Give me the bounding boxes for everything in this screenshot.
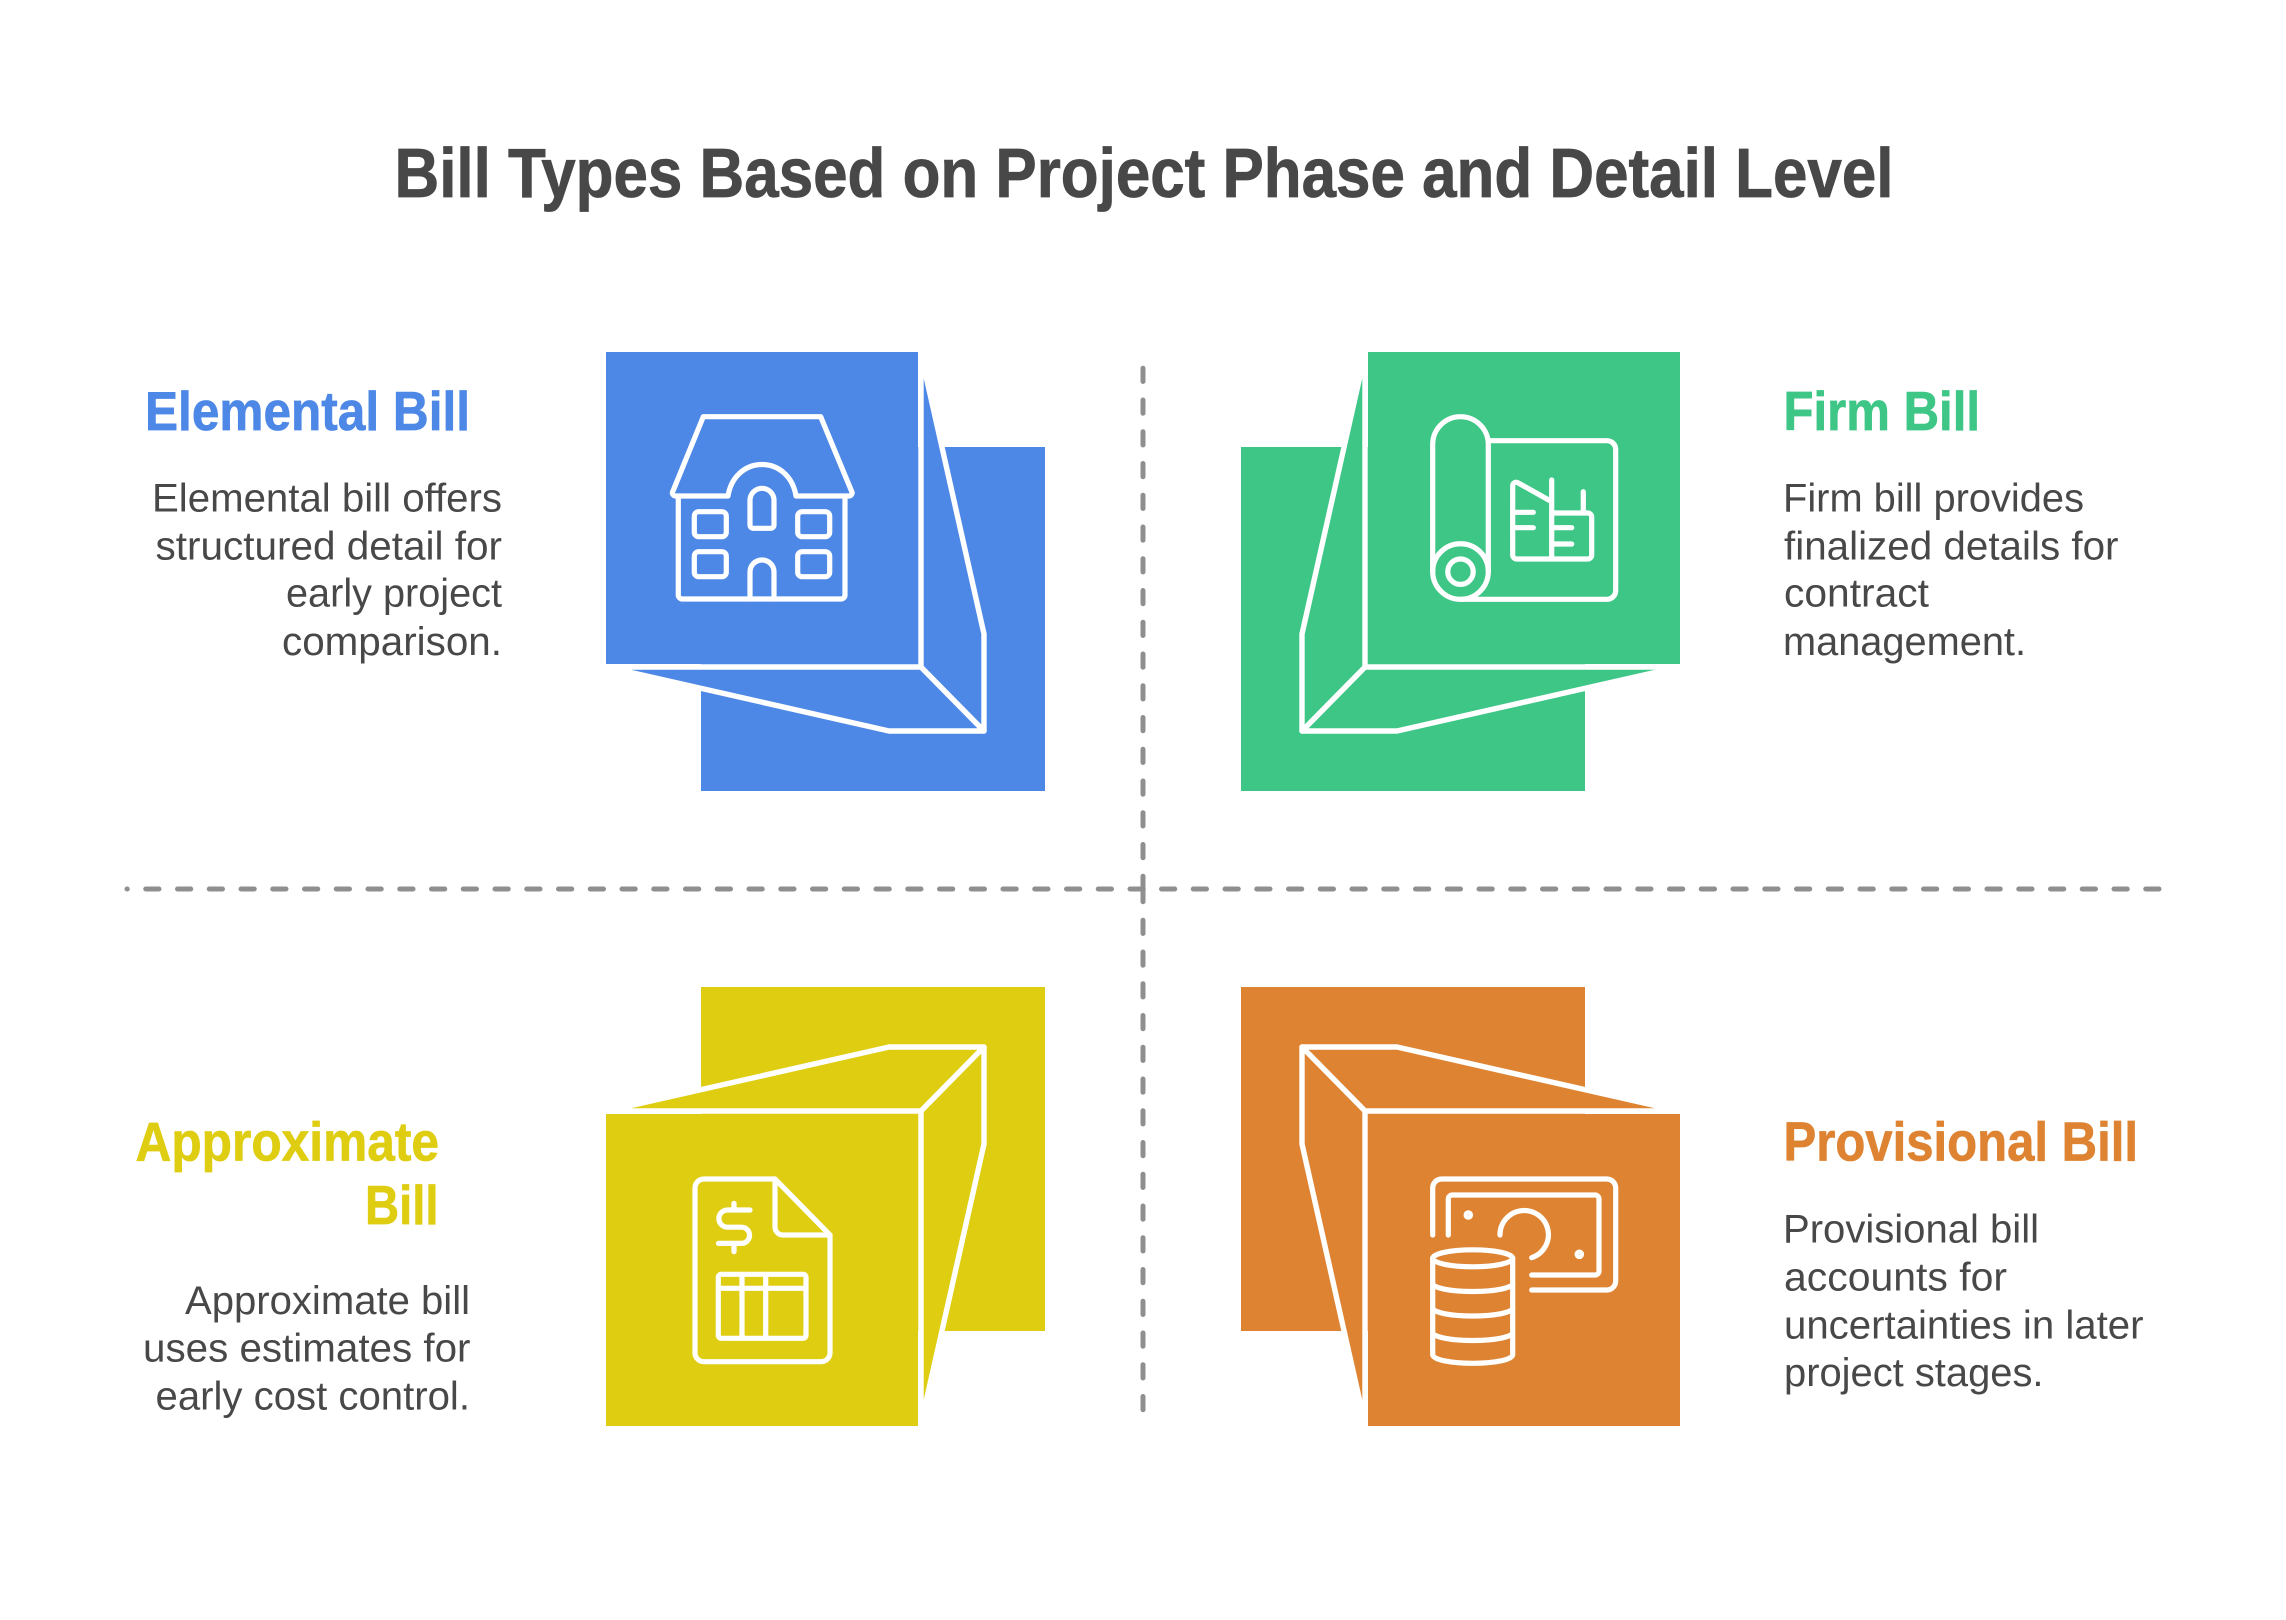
description: firm bill [1783,477,2118,664]
title: Bill Types Based on Project Phase and Detail Level [394,134,1894,212]
icon: cash and coin stack [1433,1179,1616,1363]
description: provisional bill [1783,1208,2144,1395]
heading: elemental bill: Elemental Bill [145,380,470,442]
description: elemental bill: early project [286,572,502,616]
panel: firm bill cube [1241,352,1680,791]
description: provisional bill: project stages. [1784,1351,2044,1395]
description: firm bill: finalized details for [1784,524,2118,568]
description: elemental bill: structured detail for [156,524,502,568]
description: elemental bill: comparison. [282,620,502,664]
text block: approximate bill [136,1111,470,1418]
heading: approximate bill [136,1111,439,1236]
text block: provisional bill [1783,1111,2144,1395]
heading: firm bill: Firm Bill [1784,380,1980,442]
heading: approximate bill: Approximate [136,1111,439,1173]
description: approximate bill: early cost control. [156,1374,470,1418]
description: provisional bill: Provisional bill [1783,1208,2039,1252]
description: approximate bill: Approximate bill [185,1279,470,1323]
icon: invoice with dollar and table [695,1179,830,1362]
icon: house [672,417,852,599]
description: firm bill: management. [1783,620,2026,664]
description: firm bill: contract [1784,572,1929,616]
text block: elemental bill [145,380,502,664]
heading: approximate bill: Bill [365,1174,438,1236]
description: provisional bill: accounts for [1784,1256,2007,1300]
description: elemental bill: Elemental bill offers [152,477,502,521]
text block: firm bill [1783,380,2118,664]
description: elemental bill [152,477,502,664]
description: provisional bill: uncertainties in later [1784,1303,2144,1347]
panel: provisional bill cube [1241,987,1680,1426]
panel: elemental bill cube [606,352,1045,791]
icon: blueprint roll [1433,417,1616,599]
description: approximate bill: uses estimates for [143,1327,470,1371]
quadrant dividers [127,368,2160,1410]
heading: provisional bill: Provisional Bill [1784,1111,2138,1173]
description: firm bill: Firm bill provides [1783,477,2084,521]
panel: approximate bill cube [606,987,1045,1426]
description: approximate bill [143,1279,470,1418]
